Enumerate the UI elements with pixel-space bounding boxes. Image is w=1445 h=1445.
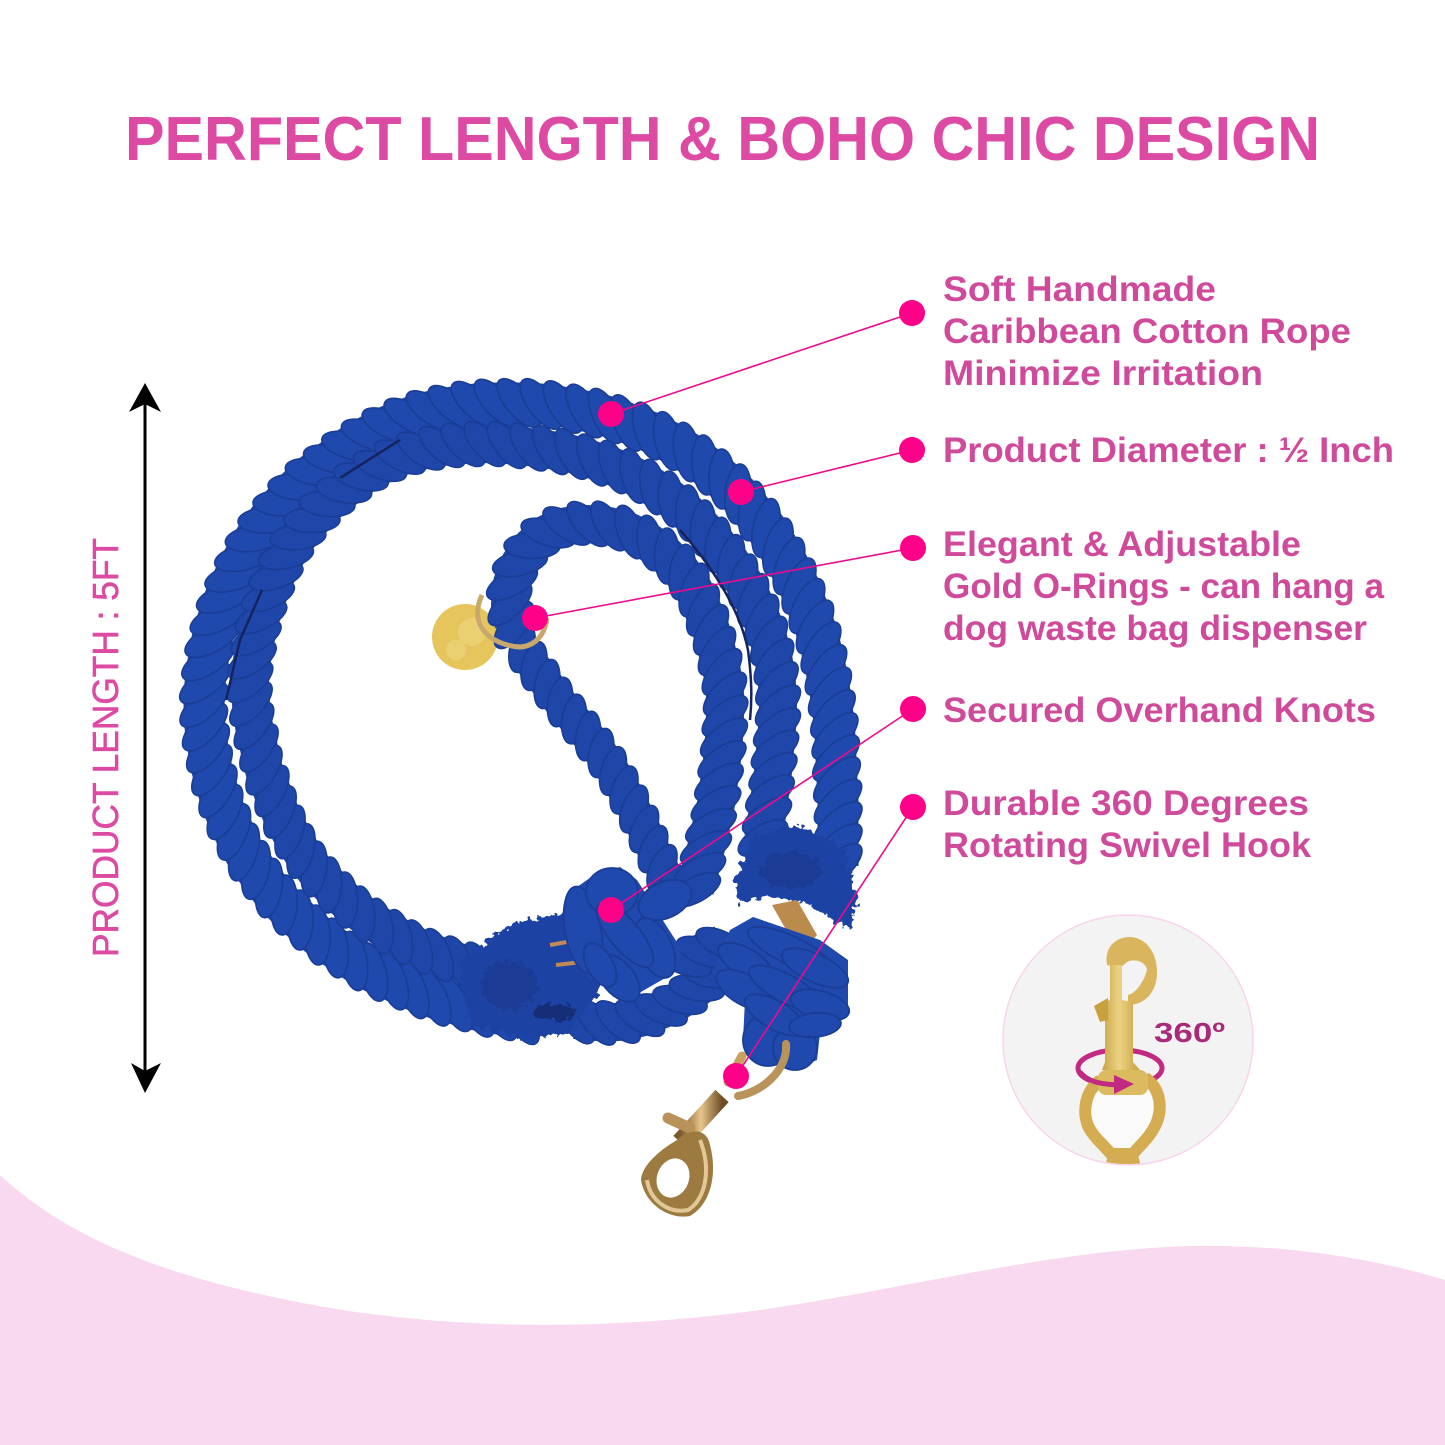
product length label: PRODUCT LENGTH : 5FT [85, 538, 126, 957]
360 label: 360º [1154, 1017, 1225, 1048]
hook eye [1107, 937, 1157, 1005]
copper whipping [772, 900, 817, 947]
callout: diameter: Product Diameter : ½ Inch [943, 431, 1394, 470]
rope: handle tail [522, 648, 670, 888]
leash [204, 403, 838, 1018]
gold coin tag [432, 604, 498, 670]
thumb latch [1094, 998, 1108, 1022]
callout: swivel hook: Durable 360 Degrees [943, 784, 1309, 823]
callout: o-rings: Elegant & Adjustable [943, 525, 1301, 564]
callout: swivel hook [943, 784, 1312, 865]
callout: o-rings: dog waste bag dispenser [943, 609, 1367, 648]
lower connecting rope [575, 975, 712, 1022]
callout dots [522, 300, 926, 1089]
D ring [1085, 1080, 1160, 1170]
callout lines [535, 313, 913, 1076]
dark gaps between ropes [226, 440, 751, 720]
length arrow [129, 383, 161, 1093]
frayed rope end: right [735, 825, 858, 930]
callout: o-rings [943, 525, 1385, 648]
callout: o-rings: Gold O-Rings - can hang a [943, 567, 1385, 606]
rope: inner coil [250, 444, 778, 968]
swivel collar [1098, 1070, 1148, 1095]
knot one [558, 867, 698, 1010]
rope: handle loop [510, 524, 725, 890]
rotation arrow front [1080, 1072, 1118, 1085]
swivel hook inset [1003, 915, 1253, 1170]
snap hook [641, 1044, 786, 1217]
knot two [710, 917, 854, 1070]
callout: soft rope: Soft Handmade [943, 270, 1216, 309]
copper threads lower left [550, 940, 582, 965]
hook body [1102, 965, 1140, 1070]
gold o-ring [478, 595, 547, 647]
rope between knots [685, 944, 722, 962]
callout: soft rope [943, 270, 1351, 393]
callout: soft rope: Minimize Irritation [943, 354, 1263, 393]
callout: knots: Secured Overhand Knots [943, 691, 1376, 730]
callout: soft rope: Caribbean Cotton Rope [943, 312, 1351, 351]
callout: swivel hook: Rotating Swivel Hook [943, 826, 1312, 865]
rope: outer coil [204, 403, 838, 1018]
pink wave background [0, 1175, 1445, 1445]
frayed rope end: lower left [460, 912, 600, 1040]
title: PERFECT LENGTH & BOHO CHIC DESIGN [125, 105, 1320, 174]
rotation arrow back [1078, 1050, 1162, 1086]
